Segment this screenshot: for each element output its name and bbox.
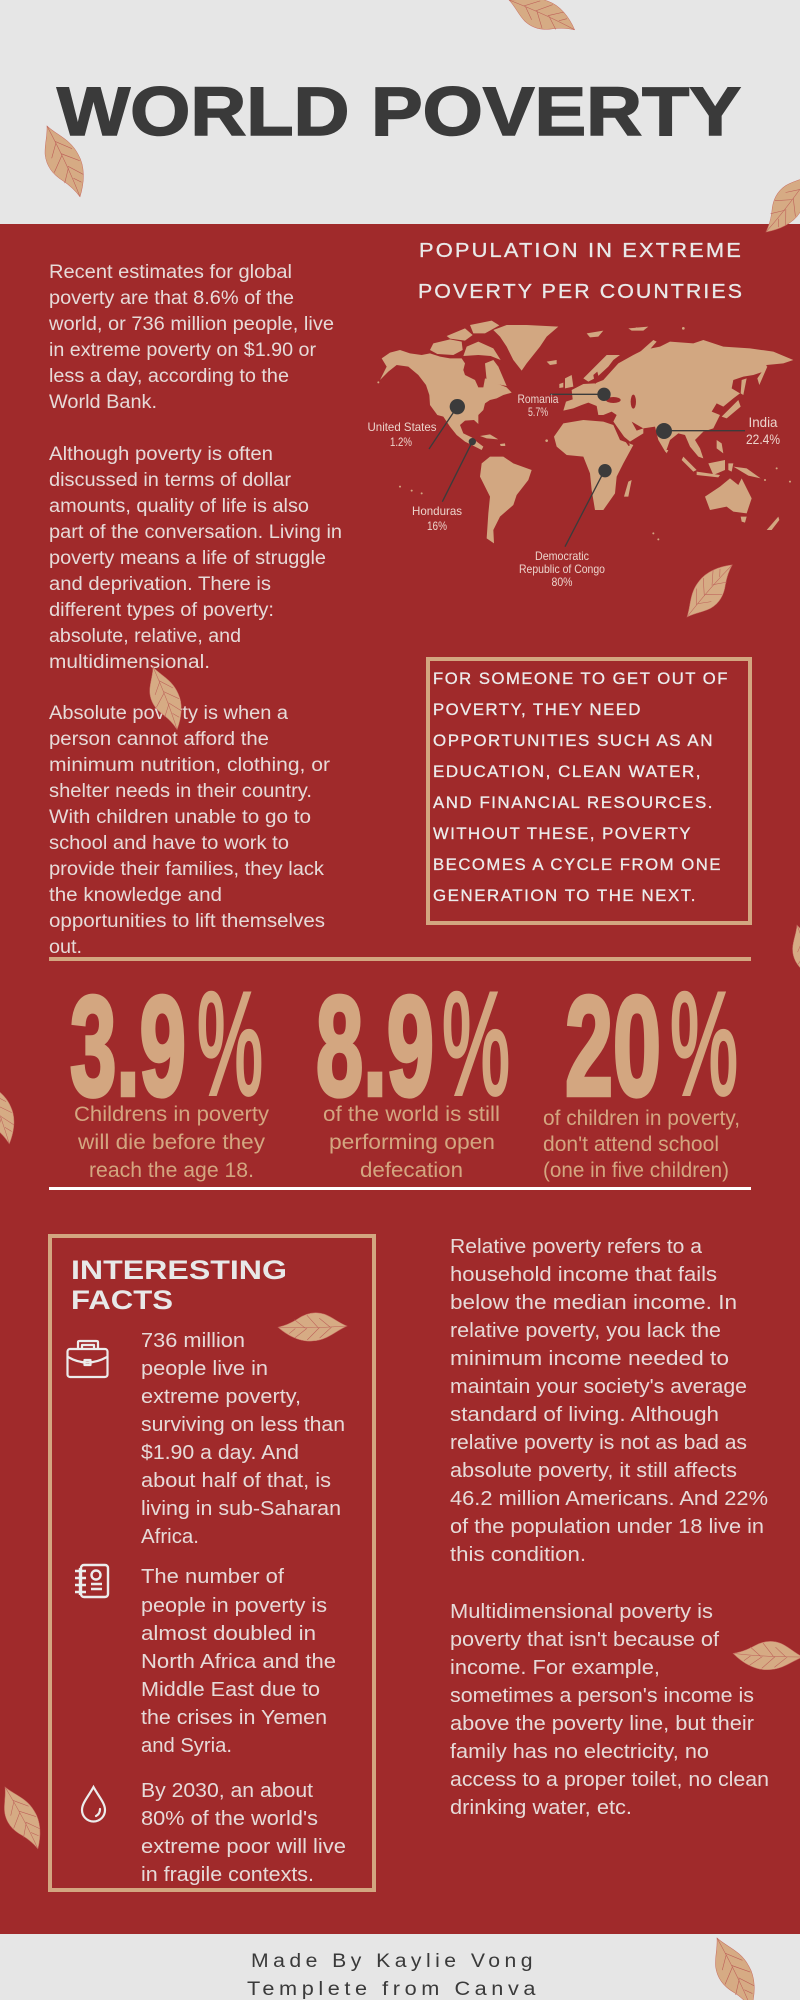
icon: briefcase: [68, 1341, 108, 1377]
fact 2 text: The number of: [141, 1566, 284, 1588]
intro text column: provide their families, they lack: [49, 859, 325, 880]
label: India: 22.4%: [746, 431, 780, 447]
label: United States: 1.2%: [390, 435, 412, 449]
stat: 8.9%: defecation: [360, 1159, 463, 1182]
relative poverty text: household income that fails: [450, 1264, 717, 1286]
stat: 20%: 20: [565, 967, 661, 1126]
label: Democratic Republic of Congo: 80%: [552, 575, 573, 589]
label: Honduras: Honduras: [412, 504, 462, 518]
header background: [0, 0, 800, 224]
intro text column: school and have to work to: [49, 833, 289, 854]
multidimensional poverty text: sometimes a person's income is: [450, 1685, 754, 1707]
label: Romania: [518, 392, 559, 419]
relative poverty text: relative poverty, you lack the: [450, 1320, 721, 1342]
footer credits: Templete from Canva: [247, 1979, 540, 2000]
map heading: [418, 239, 744, 303]
fact 2 text: [141, 1566, 336, 1757]
intro text column: Recent estimates for global: [49, 262, 292, 283]
intro text column: opportunities to lift themselves: [49, 911, 325, 932]
label: United States: United States: [368, 420, 436, 434]
intro text column: multidimensional.: [49, 652, 210, 673]
multidimensional poverty text: drinking water, etc.: [450, 1797, 632, 1819]
leaf: top: [503, 0, 581, 43]
leaf: left header: [33, 119, 95, 203]
intro text column: and deprivation. There is: [49, 574, 271, 595]
fact 1 text: living in sub-Saharan: [141, 1498, 341, 1520]
intro text column: discussed in terms of dollar: [49, 470, 292, 491]
label: Democratic Republic of Congo: [519, 549, 605, 589]
fact 2 text: people in poverty is: [141, 1595, 327, 1617]
intro text column: amounts, quality of life is also: [49, 496, 309, 517]
fact 3 text: in fragile contexts.: [141, 1864, 314, 1886]
fact 1 text: [141, 1330, 345, 1548]
world map: [377, 321, 793, 547]
fact 1 text: about half of that, is: [141, 1470, 331, 1492]
intro text column: less a day, according to the: [49, 366, 289, 387]
stat: 8.9%: %: [442, 962, 510, 1125]
label: India: [746, 414, 780, 447]
intro text column: [48, 262, 342, 958]
relative poverty text: absolute poverty, it still affects: [450, 1460, 737, 1482]
relative poverty text: 46.2 million Americans. And 22%: [450, 1488, 768, 1510]
fact 3 text: [141, 1780, 346, 1886]
intro text column: With children unable to go to: [49, 807, 311, 828]
pin: Congo: [565, 464, 612, 547]
footer credits: [247, 1951, 540, 2000]
label: Democratic Republic of Congo: Democratic: [535, 549, 589, 563]
relative poverty text: maintain your society's average: [450, 1376, 747, 1398]
stat: 20%: don't attend school: [543, 1133, 719, 1156]
intro text column: World Bank.: [49, 392, 157, 413]
fact 2 text: almost doubled in: [141, 1623, 316, 1645]
fact 1 text: extreme poverty,: [141, 1386, 301, 1408]
callout box: AND FINANCIAL RESOURCES.: [433, 794, 714, 812]
intro text column: shelter needs in their country.: [49, 781, 312, 802]
stat: 3.9%: Childrens in poverty: [74, 1103, 270, 1126]
intro text column: out.: [49, 937, 82, 958]
fact 2 text: and Syria.: [141, 1735, 232, 1757]
intro text column: poverty are that 8.6% of the: [49, 288, 294, 309]
leaf: left edge: [0, 1075, 23, 1149]
callout box: POVERTY, THEY NEED: [433, 701, 642, 719]
intro text column: absolute, relative, and: [49, 626, 241, 647]
stat: 3.9%: 3.9: [70, 967, 186, 1126]
pin: India: [656, 423, 745, 439]
stat: 8.9%: performing open: [329, 1131, 495, 1154]
title: WORLD POVERTY: [57, 73, 741, 150]
intro text column: different types of poverty:: [49, 600, 274, 621]
footer credits: Made By Kaylie Vong: [251, 1951, 537, 1972]
fact 1 text: Africa.: [141, 1526, 199, 1548]
facts heading: FACTS: [71, 1285, 173, 1315]
multidimensional poverty text: family has no electricity, no: [450, 1741, 709, 1763]
intro text column: minimum nutrition, clothing, or: [49, 755, 331, 776]
fact 1 text: people live in: [141, 1358, 268, 1380]
leaf: right of text: [732, 1639, 800, 1672]
pin: Honduras: [442, 438, 476, 502]
intro text column: person cannot afford the: [49, 729, 269, 750]
stat: 3.9%: %: [197, 962, 263, 1125]
intro text column: Although poverty is often: [49, 444, 273, 465]
multidimensional poverty text: Multidimensional poverty is: [450, 1601, 713, 1623]
relative poverty text: Relative poverty refers to a: [450, 1236, 703, 1258]
fact 3 text: extreme poor will live: [141, 1836, 346, 1858]
label: India: India: [748, 414, 778, 430]
stat: 20%: of children in poverty,: [543, 1107, 740, 1130]
callout box: BECOMES A CYCLE FROM ONE: [433, 856, 722, 874]
intro text column: poverty means a life of struggle: [49, 548, 326, 569]
multidimensional poverty text: [450, 1601, 769, 1819]
relative poverty text: below the median income. In: [450, 1292, 737, 1314]
leaf: over intro text: [141, 662, 190, 734]
panel: interesting facts: [50, 1236, 374, 1890]
leaf: facts panel: [278, 1312, 347, 1342]
label: United States: [368, 420, 436, 449]
relative poverty text: of the population under 18 live in: [450, 1516, 764, 1538]
relative poverty text: minimum income needed to: [450, 1348, 729, 1370]
map heading: POPULATION IN EXTREME: [419, 239, 743, 262]
fact 1 text: 736 million: [141, 1330, 245, 1352]
stat: 3.9%: will die before they: [77, 1131, 266, 1154]
fact 3 text: 80% of the world's: [141, 1808, 318, 1830]
intro text column: world, or 736 million people, live: [48, 314, 334, 335]
leaf: right edge: [785, 921, 800, 991]
multidimensional poverty text: income. For example,: [450, 1657, 660, 1679]
fact 3 text: By 2030, an about: [141, 1780, 313, 1802]
relative poverty text: this condition.: [450, 1544, 586, 1566]
leaf: below map: [676, 555, 743, 626]
stat: 3.9%: reach the age 18.: [89, 1159, 254, 1182]
callout box: [428, 659, 750, 923]
leaf: right header: [755, 166, 800, 241]
leaf: footer: [703, 1931, 766, 2000]
stat: 20%: (one in five children): [543, 1159, 729, 1182]
intro text column: the knowledge and: [49, 885, 222, 906]
fact 2 text: the crises in Yemen: [141, 1707, 327, 1729]
fact 2 text: Middle East due to: [141, 1679, 320, 1701]
pin: Romania: [550, 388, 611, 401]
callout box: EDUCATION, CLEAN WATER,: [433, 763, 702, 781]
stat: 20%: %: [670, 962, 738, 1125]
icon: notebook: [75, 1565, 108, 1597]
fact 2 text: North Africa and the: [141, 1651, 336, 1673]
footer background: [0, 1934, 800, 2000]
relative poverty text: standard of living. Although: [450, 1404, 719, 1426]
multidimensional poverty text: access to a proper toilet, no clean: [450, 1769, 769, 1791]
callout box: OPPORTUNITIES SUCH AS AN: [433, 732, 714, 750]
facts heading: INTERESTING: [71, 1255, 287, 1285]
facts heading: [71, 1255, 287, 1315]
stat: 20%: [543, 962, 740, 1182]
intro text column: in extreme poverty on $1.90 or: [49, 340, 317, 361]
leaf: lower left: [0, 1780, 51, 1855]
intro text column: part of the conversation. Living in: [49, 522, 342, 543]
label: Romania: 5.7%: [528, 405, 548, 419]
intro text column: Absolute poverty is when a: [49, 703, 288, 724]
stat: 8.9%: 8.9: [316, 967, 434, 1126]
fact 1 text: $1.90 a day. And: [141, 1442, 299, 1464]
fact 1 text: surviving on less than: [141, 1414, 345, 1436]
label: Romania: Romania: [518, 392, 559, 406]
relative poverty text: [450, 1236, 768, 1566]
multidimensional poverty text: above the poverty line, but their: [450, 1713, 754, 1735]
callout box: WITHOUT THESE, POVERTY: [433, 825, 692, 843]
label: Democratic Republic of Congo: Republic of Congo: [519, 562, 605, 576]
stat: 8.9%: of the world is still: [323, 1103, 500, 1126]
icon: water drop: [82, 1787, 105, 1822]
relative poverty text: relative poverty is not as bad as: [450, 1432, 747, 1454]
label: Honduras: [412, 504, 462, 533]
pin: United States: [429, 399, 465, 449]
map heading: POVERTY PER COUNTRIES: [418, 280, 744, 303]
label: Honduras: 16%: [427, 519, 447, 533]
multidimensional poverty text: poverty that isn't because of: [450, 1629, 719, 1651]
callout box: GENERATION TO THE NEXT.: [433, 887, 697, 905]
callout box: FOR SOMEONE TO GET OUT OF: [433, 670, 729, 688]
